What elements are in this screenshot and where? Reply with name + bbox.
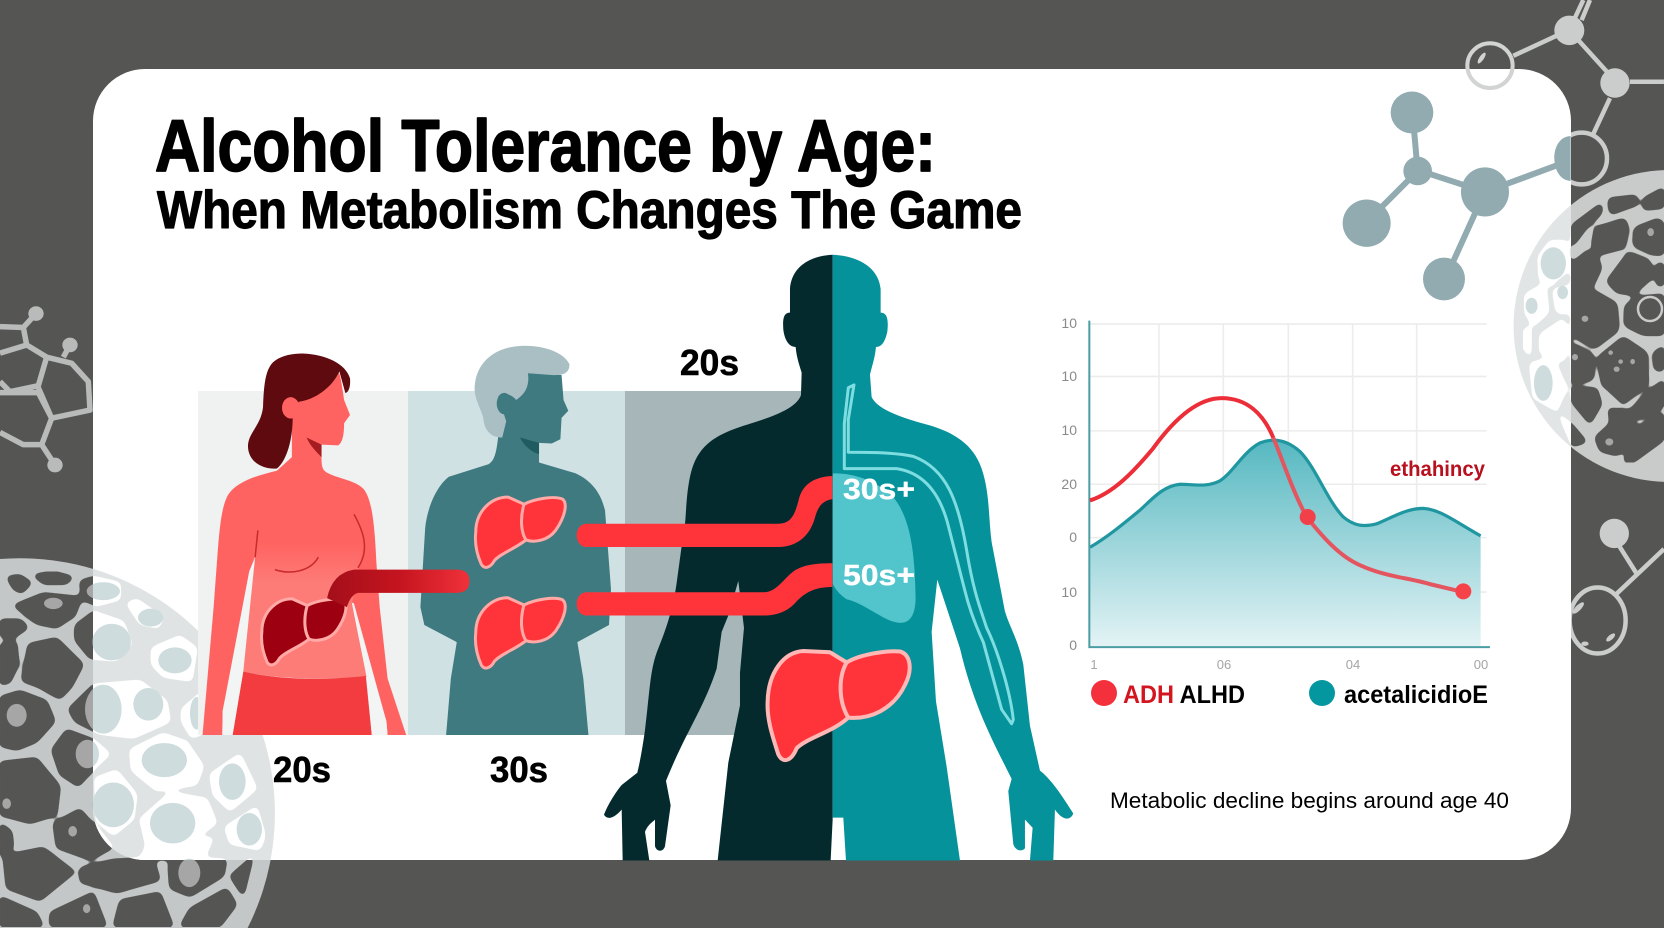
central figure: [577, 255, 1073, 860]
legend text: acetalicidioE: acetalicidioE: [1344, 681, 1488, 709]
legend swatch: teal: [1309, 680, 1335, 706]
y axis labels: 10: [1061, 422, 1077, 438]
x axis labels: 00: [1474, 657, 1488, 672]
y axis labels: 0: [1069, 637, 1077, 653]
liver lower: [475, 598, 565, 668]
teal area series: [1090, 440, 1481, 646]
vessels: [844, 385, 1013, 724]
label: 20s bottom: 20s: [273, 749, 331, 790]
y axis labels: 10: [1061, 368, 1077, 384]
y axis labels: 10: [1061, 315, 1077, 331]
connector upper: [577, 476, 832, 547]
molecule ring crossing card top: [1467, 43, 1513, 88]
liver: [262, 599, 346, 665]
molecule: left background: [0, 306, 90, 472]
ear: [282, 397, 299, 419]
x axis labels: 06: [1217, 657, 1231, 672]
label: 30s bottom: 30s: [490, 749, 548, 790]
line chart: [1061, 315, 1490, 672]
molecule: top right background: [1513, 0, 1664, 184]
x axis labels: 1: [1090, 657, 1098, 672]
molecule: teal-grey inside card: [1343, 92, 1571, 300]
arm gaps: [222, 557, 388, 735]
white card: [93, 69, 1571, 860]
data point: [1300, 509, 1316, 525]
body: [420, 371, 611, 735]
x axis labels: 04: [1346, 657, 1360, 672]
figure: person in 30s: [420, 346, 611, 735]
neck shadow: [307, 437, 322, 457]
body: [203, 371, 406, 735]
legend text: ADH ALHD: ADH ALHD: [1123, 681, 1245, 709]
label: 20s top: 20s: [680, 342, 739, 383]
torso: [243, 543, 367, 679]
x axis labels: [1090, 657, 1488, 672]
hair: [248, 354, 350, 469]
lung: [833, 473, 916, 623]
label: 50s+: 50s+: [843, 560, 915, 592]
y axis labels: 0: [1069, 529, 1077, 545]
age comparison panels: [198, 391, 805, 735]
cell: left background: [0, 558, 275, 928]
legend swatch: red: [1091, 680, 1117, 706]
series label: ethahincy: [1390, 458, 1485, 481]
connector lower: [577, 563, 832, 616]
cell: right background: [1514, 170, 1664, 482]
liver: [768, 651, 910, 760]
y axis labels: 20: [1061, 476, 1077, 492]
dark half: [604, 255, 833, 860]
neck shadow: [520, 437, 539, 454]
figure: woman in 20s: [203, 354, 406, 735]
teal half: [833, 255, 1073, 860]
label: 30s+: 30s+: [843, 474, 915, 506]
legend: [1091, 680, 1488, 709]
breast lines: [255, 514, 365, 572]
liver upper: [475, 497, 565, 567]
subtitle: When Metabolism Changes The Game: [157, 181, 1022, 240]
pants: [233, 671, 372, 735]
connector: woman liver to panel: [327, 570, 469, 607]
title: Alcohol Tolerance by Age:: [155, 106, 936, 187]
red series: [1090, 398, 1463, 592]
caption: Metabolic decline begins around age 40: [1110, 788, 1509, 813]
data point end: [1455, 583, 1471, 599]
hair: [475, 346, 569, 437]
grid and axes: [1089, 321, 1490, 647]
ear: [497, 393, 512, 414]
molecule: lower right background: [1570, 519, 1664, 654]
y axis labels: 10: [1061, 584, 1077, 600]
y axis labels: [1061, 315, 1077, 653]
